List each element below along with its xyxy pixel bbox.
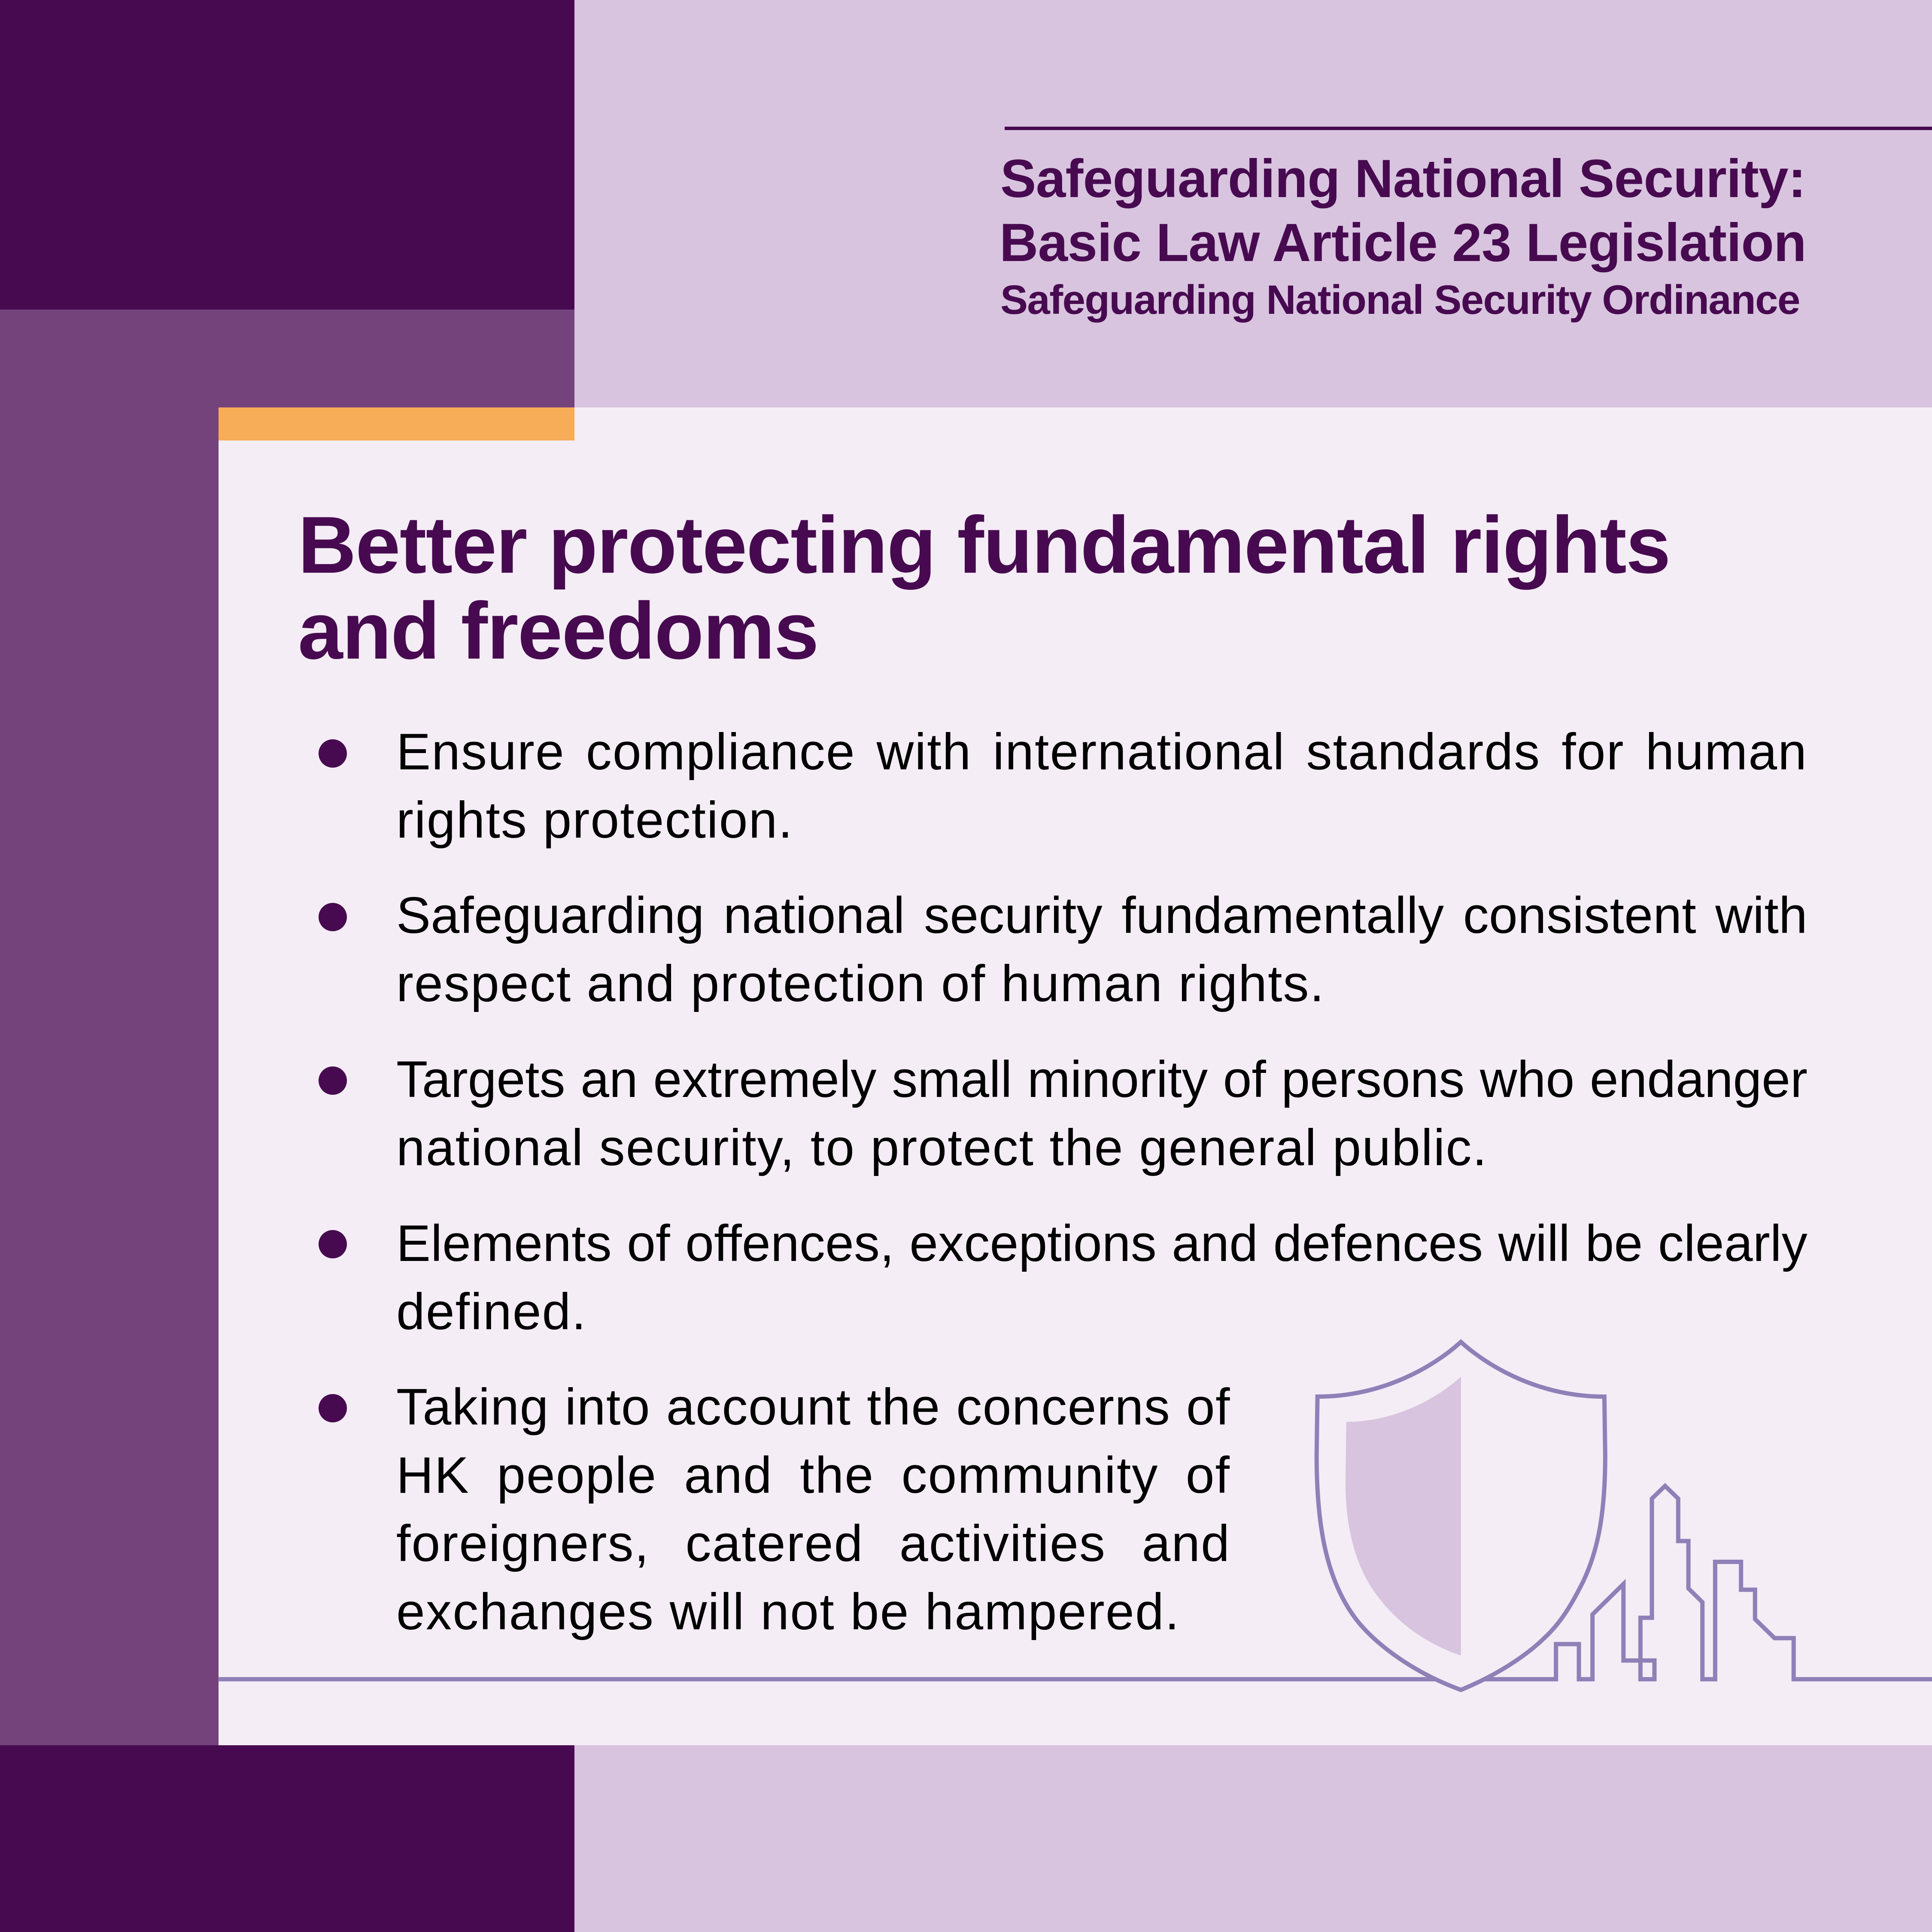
panel: dark top-left block <box>0 0 574 310</box>
bullet item 3: national security, to protect the general public. <box>396 1119 1488 1176</box>
text: Safeguarding national security fundamentally consistent with <box>396 887 1807 944</box>
bullet dot <box>319 903 347 931</box>
bullet item 5: HK people and the community of <box>396 1446 1230 1504</box>
heading: and freedoms <box>298 586 818 676</box>
bullet item 4 <box>0 1209 1932 1347</box>
title line 3: Safeguarding National Security Ordinance <box>1000 277 1800 323</box>
text: Elements of offences, exceptions and defences will be clearly <box>396 1215 1807 1272</box>
bullet dot <box>319 1066 347 1095</box>
bullet item 1 <box>0 718 1932 855</box>
orange accent bar <box>219 407 574 440</box>
title line 1: Safeguarding National Security: <box>1000 149 1806 209</box>
header title <box>999 147 1815 331</box>
bullet item 1: rights protection. <box>396 791 793 849</box>
panel: dark bottom-left block <box>0 1745 574 1932</box>
bullet dot <box>319 1394 347 1422</box>
panel: mid purple block <box>0 310 574 407</box>
bullet item 5 <box>0 1373 1245 1648</box>
bullet item 5: exchanges will not be hampered. <box>396 1583 1180 1640</box>
text: Targets an extremely small minority of persons who endanger <box>396 1051 1807 1108</box>
bullet dot <box>319 1230 347 1258</box>
icon: city skyline with ground line <box>219 1486 1932 1679</box>
bullet item 2: respect and protection of human rights. <box>396 955 1325 1012</box>
bullet item 4: defined. <box>396 1283 587 1340</box>
panel: mid purple left column <box>0 407 219 1745</box>
text: Taking into account the concerns of <box>396 1378 1230 1436</box>
bullet item 2 <box>0 881 1932 1019</box>
bullet item 3 <box>0 1045 1932 1183</box>
bullet item 5: foreigners, catered activities and <box>396 1515 1230 1572</box>
heading <box>298 502 1715 674</box>
heading: Better protecting fundamental rights <box>298 500 1670 590</box>
panel: main content card <box>219 407 1932 1745</box>
icon: shield <box>1317 1342 1605 1690</box>
title line 2: Basic Law Article 23 Legislation <box>999 213 1806 273</box>
bullet dot <box>319 739 347 768</box>
text: Ensure compliance with international standards for human <box>396 723 1807 781</box>
header rule <box>1005 127 1932 130</box>
